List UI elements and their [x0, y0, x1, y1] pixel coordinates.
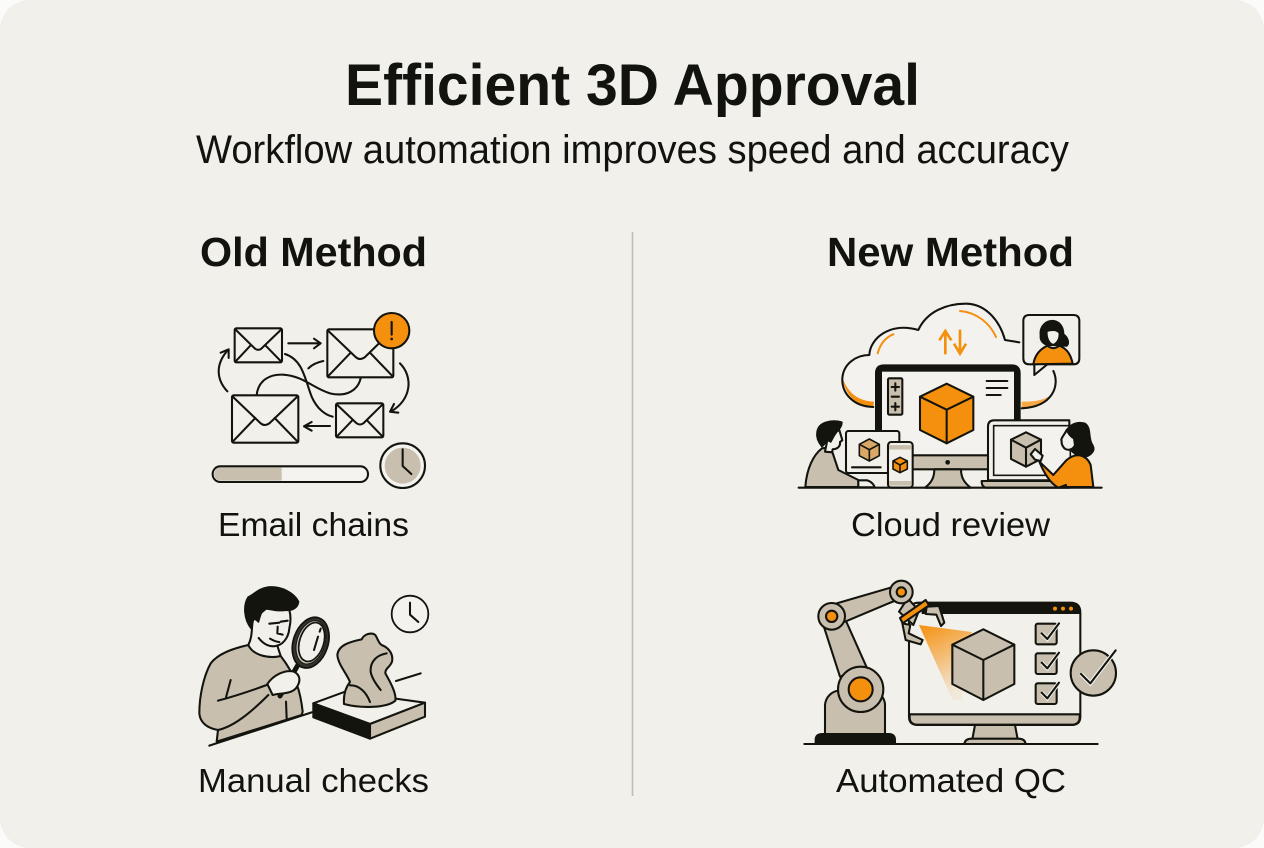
phone	[888, 442, 913, 488]
clock	[380, 443, 425, 488]
icon: email chains	[213, 313, 425, 488]
icon: manual checks	[199, 587, 428, 746]
person right	[1031, 423, 1093, 488]
envelope large bottom left	[232, 395, 298, 443]
tablet	[846, 431, 899, 473]
person	[199, 587, 303, 742]
sync arrows	[939, 330, 966, 354]
laptop	[982, 420, 1070, 488]
hand	[267, 671, 299, 695]
heading: old method: Old Method	[200, 229, 427, 275]
icon: cloud review	[799, 304, 1102, 488]
table edge	[209, 673, 421, 746]
approval badge	[1071, 650, 1116, 696]
text lines	[987, 381, 1007, 395]
label: manual checks: Manual checks	[198, 762, 429, 799]
alert badge	[374, 313, 409, 348]
subtitle: Workflow automation improves speed and accuracy	[196, 128, 1069, 172]
desk line	[799, 485, 1102, 491]
progress bar	[213, 466, 368, 482]
video call bubble	[1023, 315, 1079, 375]
main monitor	[875, 364, 1021, 488]
robot arm	[816, 581, 944, 744]
label: cloud review: Cloud review	[851, 506, 1050, 543]
heading: new method: New Method	[827, 229, 1074, 275]
icon: automated qc	[804, 581, 1116, 744]
small clock	[392, 596, 428, 632]
floor line	[804, 741, 1098, 747]
orange cube	[920, 384, 973, 443]
monitor tool strip	[888, 378, 902, 415]
envelope small top left	[235, 328, 282, 362]
qc monitor	[909, 603, 1080, 744]
title: Efficient 3D Approval	[345, 53, 920, 118]
envelope small bottom right	[336, 403, 383, 437]
cloud	[842, 304, 1056, 408]
tangled email connectors	[219, 339, 409, 431]
sculpture	[337, 634, 396, 707]
magnifying glass	[280, 613, 335, 696]
inspected cube	[952, 629, 1014, 700]
label: email chains: Email chains	[218, 506, 409, 543]
gripper	[900, 600, 944, 644]
scan beam	[919, 625, 972, 701]
envelope large top right	[327, 329, 393, 377]
platform	[313, 692, 425, 739]
person left	[805, 421, 875, 487]
checklist	[1036, 623, 1059, 704]
label: automated qc: Automated QC	[836, 762, 1066, 799]
